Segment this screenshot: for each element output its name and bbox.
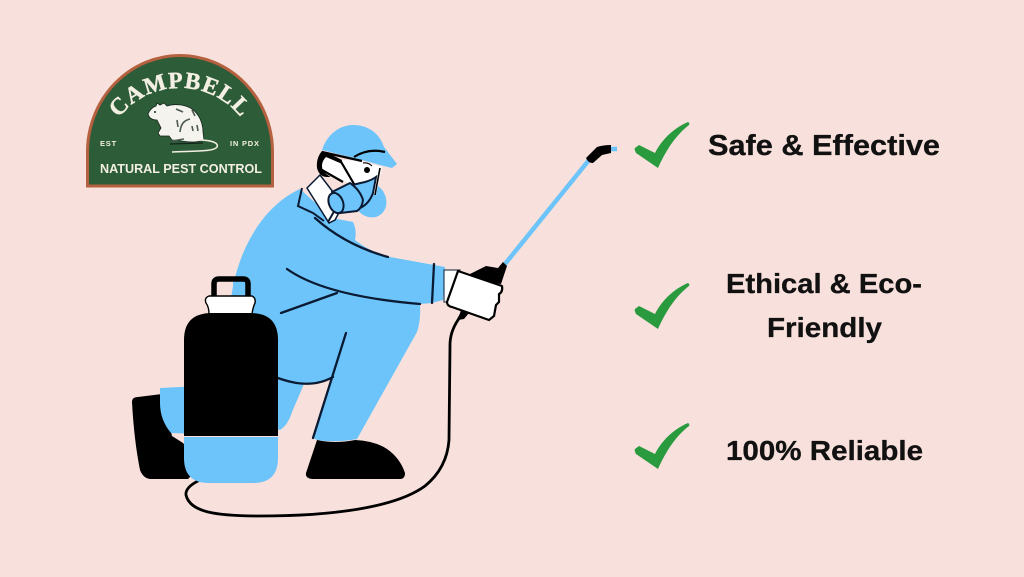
icon: check mark bbox=[635, 122, 689, 168]
tank black body bbox=[184, 313, 278, 436]
illustration: kneeling pest control worker with sprayer bbox=[132, 125, 617, 516]
label: Friendly bbox=[767, 312, 882, 343]
cap bbox=[322, 125, 397, 168]
spray wand bbox=[505, 145, 617, 264]
back boot bbox=[132, 394, 192, 479]
logo name: CAMPBELL bbox=[110, 72, 248, 116]
beard shape bbox=[354, 186, 386, 217]
label: 100% Reliable bbox=[726, 435, 923, 466]
ear and hair bbox=[317, 151, 352, 184]
logo tagline: NATURAL PEST CONTROL bbox=[100, 161, 262, 176]
icon: check mark bbox=[635, 283, 689, 329]
back leg bbox=[160, 386, 200, 434]
label bbox=[726, 268, 922, 343]
label: Ethical & Eco- bbox=[726, 268, 922, 299]
check item: Safe & Effective bbox=[635, 122, 940, 168]
body lines bbox=[278, 218, 434, 438]
front boot bbox=[306, 440, 405, 479]
tank neck bbox=[205, 296, 255, 314]
body bbox=[225, 189, 445, 441]
hose bbox=[186, 313, 462, 516]
glove bbox=[447, 271, 502, 320]
logo label: IN PDX: IN PDX bbox=[230, 139, 260, 148]
badge arch bbox=[88, 55, 272, 186]
check item: Ethical & Eco-Friendly bbox=[635, 268, 922, 343]
tank blue base bbox=[184, 437, 278, 483]
logo label: EST: EST bbox=[100, 139, 117, 148]
hood and neck bbox=[307, 175, 343, 223]
label: Safe & Effective bbox=[708, 130, 940, 162]
logo: Campbell Natural Pest Control badge bbox=[86, 54, 274, 188]
icon: check mark bbox=[635, 423, 689, 469]
respirator mask bbox=[326, 177, 376, 215]
sprayer handle bbox=[470, 262, 507, 284]
icon: rat bbox=[148, 103, 217, 152]
eye bbox=[363, 163, 380, 195]
face bbox=[338, 160, 382, 195]
white cuff bbox=[444, 270, 460, 302]
spray tank bbox=[184, 279, 278, 483]
tank handle bbox=[214, 279, 248, 297]
collar bbox=[298, 188, 336, 222]
check item: 100% Reliable bbox=[635, 423, 923, 469]
